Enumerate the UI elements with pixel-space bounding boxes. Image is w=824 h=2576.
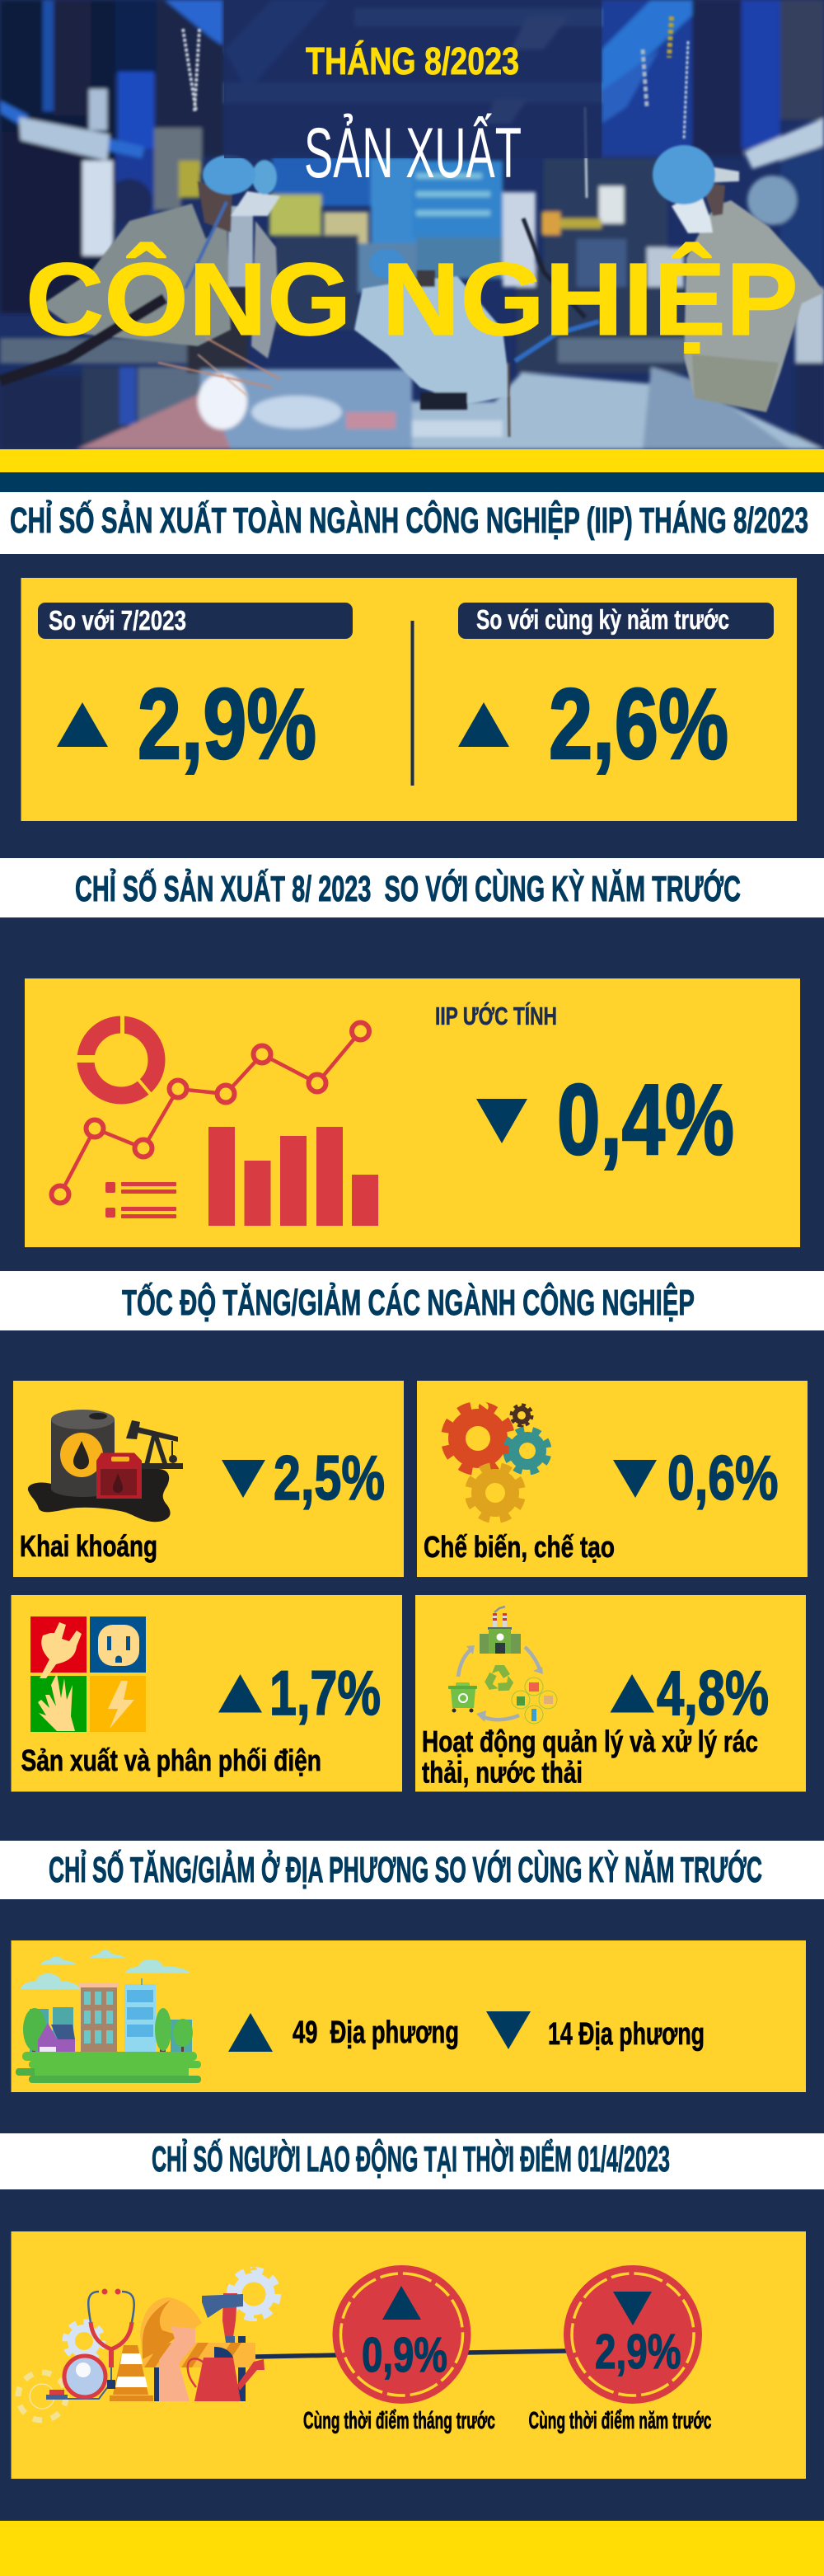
yellow band	[0, 449, 824, 472]
magnifier	[46, 2356, 105, 2400]
icon: city	[16, 1950, 201, 2083]
arrow down	[476, 1099, 527, 1143]
orange gear	[441, 1401, 515, 1476]
value 2,5%: 2,5%	[274, 1443, 385, 1513]
stethoscope	[68, 2288, 134, 2399]
label: Khai khoáng	[20, 1529, 157, 1563]
footer band	[0, 2521, 824, 2576]
caption: previous year: Cùng thời điểm năm trước	[529, 2408, 712, 2434]
hand	[159, 2326, 195, 2401]
icon: charts	[51, 1010, 378, 1226]
value 1,7%: 1,7%	[269, 1659, 381, 1729]
connector line	[255, 2351, 567, 2357]
title: line two: CÔNG NGHIỆP	[26, 242, 798, 357]
panel: waste treatment	[415, 1595, 806, 1792]
product circles	[512, 1677, 557, 1724]
arrow down	[486, 2011, 531, 2049]
oil pump	[126, 1420, 183, 1469]
axe	[202, 2293, 243, 2343]
arrow up	[382, 2286, 421, 2320]
heading: industries	[0, 1271, 824, 1330]
icon: recycling	[448, 1607, 557, 1724]
small dark gear	[512, 1405, 531, 1425]
hero banner photo: factory workers	[0, 0, 824, 449]
bin	[448, 1682, 477, 1713]
heading: localities	[0, 1841, 824, 1899]
arrow up	[458, 702, 509, 747]
dark blue band	[0, 472, 824, 492]
outlet	[98, 1625, 139, 1666]
teal gear	[502, 1425, 553, 1476]
icon: gears	[441, 1401, 553, 1524]
bar chart	[208, 1127, 378, 1226]
label two lines: thải, nước thải	[422, 1756, 583, 1789]
list glyph	[105, 1182, 176, 1218]
panel: IIP comparison	[21, 578, 797, 821]
panel: electricity	[12, 1595, 402, 1792]
label: Sản xuất và phân phối điện	[21, 1743, 321, 1777]
navy background	[0, 2189, 824, 2521]
arrow up	[57, 702, 108, 747]
panel: workers	[12, 2231, 806, 2479]
section 5	[0, 2133, 824, 2521]
icon: oil barrel	[28, 1410, 183, 1522]
plug	[40, 1622, 82, 1678]
section 2	[0, 858, 824, 1271]
ground	[16, 2052, 201, 2083]
helmet	[140, 2297, 202, 2359]
jerry can	[96, 1452, 142, 1499]
arrow down	[222, 1460, 265, 1498]
badge: previous month	[333, 2265, 471, 2404]
decrease count: 14 Địa phương	[548, 2017, 705, 2052]
centre worker	[354, 276, 511, 404]
arrow up	[228, 2013, 273, 2052]
value 0,4%: 0,4%	[557, 1063, 734, 1175]
chains and sparks	[158, 16, 688, 437]
divider	[410, 621, 414, 786]
hand	[38, 1673, 75, 1731]
purple house	[38, 2023, 75, 2054]
donut chart	[70, 1010, 157, 1101]
panel: manufacturing	[417, 1381, 808, 1577]
value 2,9%: 2,9%	[595, 2325, 681, 2379]
navy background	[0, 1899, 824, 2133]
brown building	[79, 1983, 119, 2056]
label two lines	[422, 1724, 758, 1789]
dark overlay behind title	[224, 0, 602, 158]
watering can	[188, 2358, 265, 2401]
panel: localities	[12, 1940, 806, 2092]
background of the factory	[0, 0, 824, 449]
far buildings	[30, 2007, 192, 2054]
barricade	[143, 2336, 255, 2401]
title: line one: SẢN XUẤT	[304, 114, 522, 193]
arrow down	[613, 1460, 657, 1498]
recycle symbol	[482, 1665, 515, 1696]
arrow up	[610, 1674, 654, 1713]
icon: occupations	[18, 2270, 278, 2420]
label pill: vs 7/2023	[38, 603, 353, 639]
gears	[18, 2270, 278, 2420]
cycle arrows	[458, 1645, 543, 1722]
value 0,6%: 0,6%	[667, 1443, 778, 1513]
bolt	[108, 1681, 134, 1729]
navy background	[0, 1330, 824, 1841]
arrow up	[218, 1674, 262, 1713]
value 4,8%: 4,8%	[657, 1659, 769, 1729]
workers and machinery	[0, 16, 824, 437]
cone	[110, 2345, 153, 2401]
left tree	[23, 2008, 46, 2059]
heading: same period	[0, 858, 824, 917]
section 3	[0, 1271, 824, 1841]
value 2,9%: 2,9%	[138, 668, 316, 780]
caption: previous month: Cùng thời điểm tháng trước	[303, 2408, 495, 2434]
label pill: vs same period: So với cùng kỳ năm trước	[476, 604, 729, 635]
section 4	[0, 1841, 824, 2133]
panel: estimated IIP	[25, 978, 800, 1247]
line chart	[51, 1022, 369, 1204]
cables	[0, 298, 165, 381]
heading: IIP	[0, 492, 824, 554]
label pill: vs 7/2023: So với 7/2023	[49, 605, 186, 636]
navy background	[0, 554, 824, 858]
blue pipe	[515, 321, 599, 361]
panel: mining	[13, 1381, 404, 1577]
navy background	[0, 917, 824, 1271]
heading: workers	[0, 2133, 824, 2189]
title: month: THÁNG 8/2023	[306, 40, 519, 82]
gold gear	[464, 1462, 527, 1524]
clouds	[21, 1950, 190, 1989]
factory	[480, 1607, 521, 1654]
left worker	[41, 204, 231, 346]
trees	[155, 2008, 193, 2059]
increase count: 49 Địa phương	[293, 2015, 459, 2050]
value 0,9%: 0,9%	[362, 2328, 447, 2382]
label: IIP estimate: IIP ƯỚC TÍNH	[435, 1001, 557, 1030]
section 1	[0, 492, 824, 858]
badge: previous year	[564, 2265, 702, 2404]
icon: electricity grid	[30, 1616, 146, 1732]
value 2,6%: 2,6%	[549, 668, 728, 780]
label: Chế biến, chế tạo	[424, 1530, 615, 1564]
right worker	[684, 200, 824, 412]
blue building	[124, 1978, 156, 2056]
arrow down	[613, 2292, 652, 2325]
